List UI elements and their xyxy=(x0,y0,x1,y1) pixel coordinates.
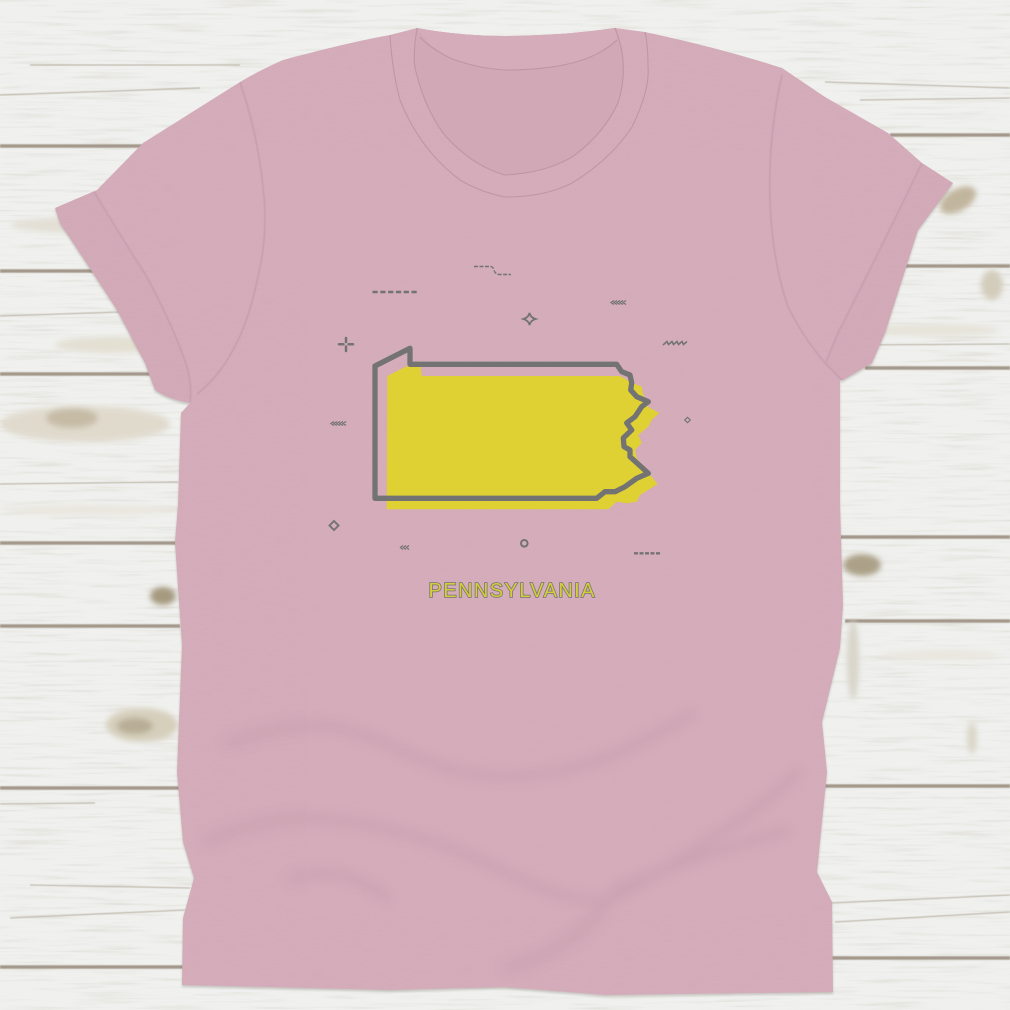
icon: four-point star xyxy=(524,313,536,325)
cuff folds xyxy=(93,190,191,402)
shirt shading, folds and seams xyxy=(93,75,922,906)
icon: diamond lower left xyxy=(330,521,338,530)
yellow state fill xyxy=(387,361,659,509)
state map: Pennsylvania xyxy=(375,348,659,509)
icon: dashed step line xyxy=(474,266,511,274)
collar xyxy=(390,28,648,197)
knots and worn patches xyxy=(0,406,170,442)
icon: small chevrons bottom xyxy=(400,546,409,550)
icon: sparkle plus xyxy=(339,338,353,351)
icon: zigzag xyxy=(663,342,687,345)
icon: dashed line bottom right xyxy=(634,552,661,554)
state name: PENNSYLVANIA xyxy=(428,580,595,602)
sleeve seams xyxy=(197,82,265,394)
decorative line icons xyxy=(330,266,690,553)
icon: circle xyxy=(521,540,528,547)
icon: chevrons left xyxy=(331,422,346,426)
icon: small diamond right xyxy=(685,417,690,423)
icon: dashed line top left xyxy=(372,291,417,293)
icon: chevrons top right xyxy=(611,300,626,304)
grey state outline xyxy=(375,348,648,498)
